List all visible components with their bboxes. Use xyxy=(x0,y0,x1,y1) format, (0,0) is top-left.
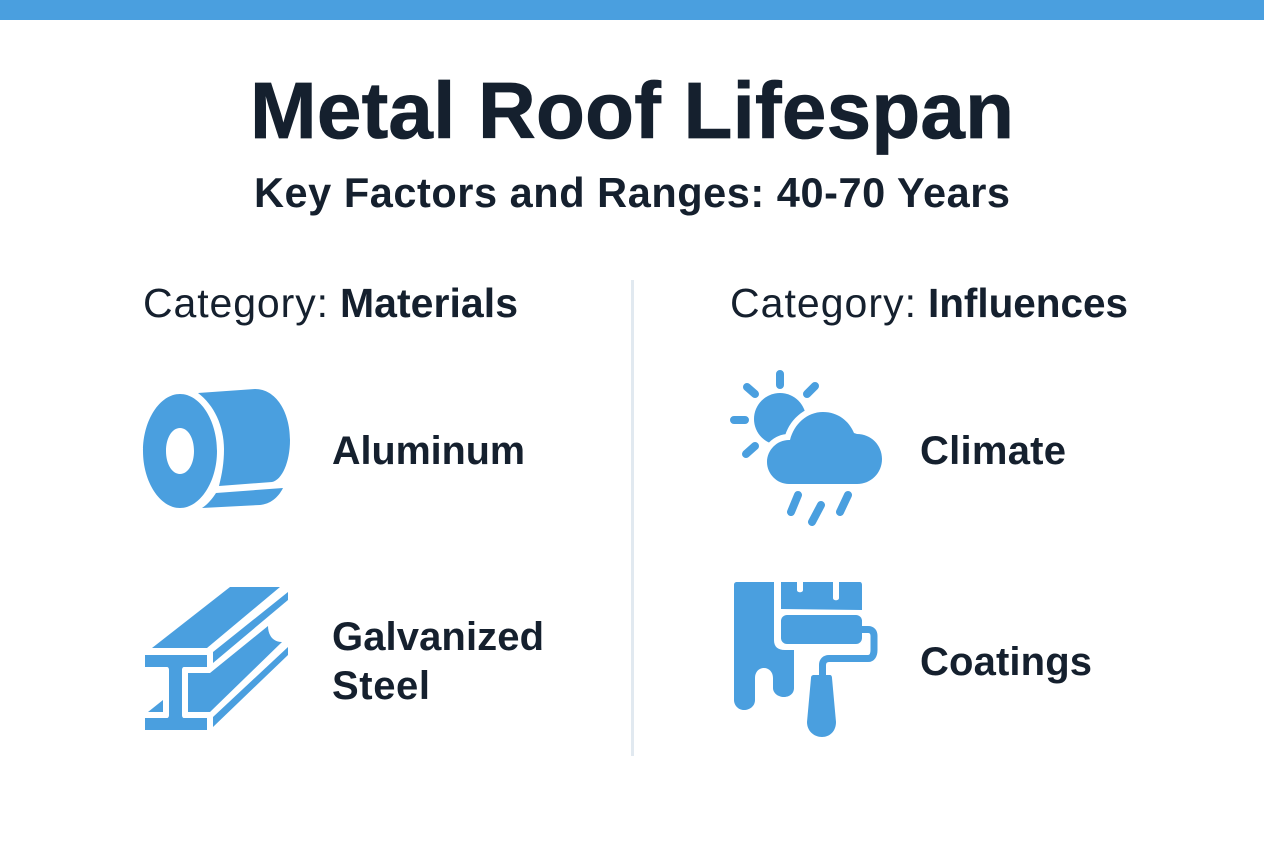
icon: sun, cloud and rain xyxy=(734,374,882,522)
icon: paint roller and drips xyxy=(734,582,874,737)
heading: category influences: Influences xyxy=(928,280,1128,326)
heading: category influences xyxy=(730,280,1128,326)
label: climate: Climate xyxy=(920,429,1066,473)
label: coatings: Coatings xyxy=(920,640,1092,684)
icon: galvanized steel beam xyxy=(145,587,288,730)
label: galvanized steel xyxy=(332,615,544,708)
label: galvanized steel: Steel xyxy=(332,664,430,708)
label: aluminum: Aluminum xyxy=(332,429,525,473)
heading: category influences: Category: xyxy=(730,280,916,326)
label: galvanized steel: Galvanized xyxy=(332,615,544,659)
top accent bar xyxy=(0,0,1264,20)
panel: materials xyxy=(143,280,544,730)
heading: category materials: Materials xyxy=(340,280,518,326)
heading: category materials: Category: xyxy=(143,280,328,326)
icon: aluminum coil xyxy=(143,389,290,508)
panel: influences xyxy=(730,280,1128,737)
subtitle: Key Factors and Ranges: 40-70 Years xyxy=(254,169,1010,216)
heading: category materials xyxy=(143,280,518,326)
title: Metal Roof Lifespan xyxy=(250,66,1014,155)
